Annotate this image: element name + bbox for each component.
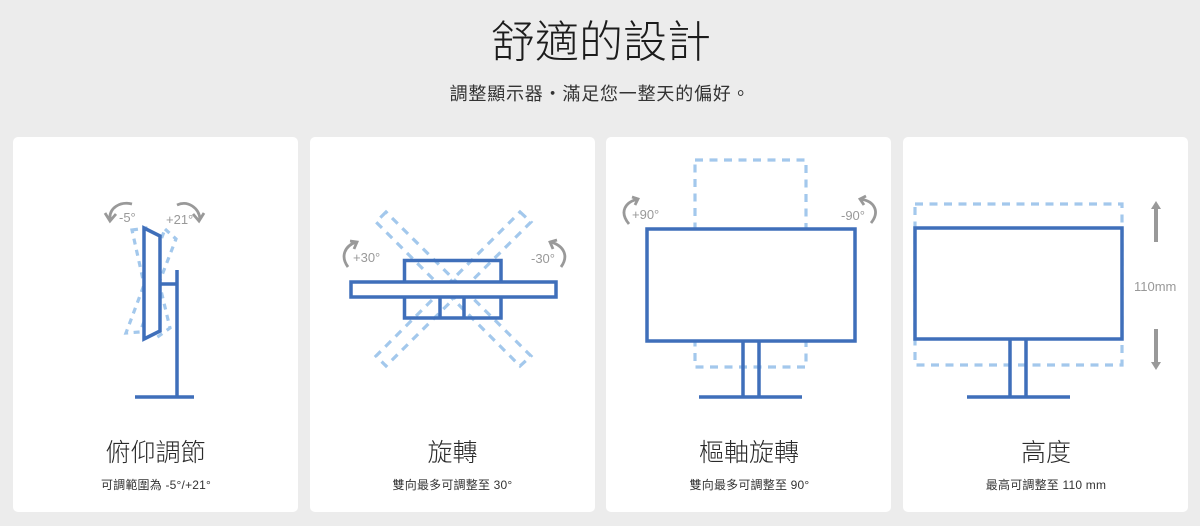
caption: height: 最高可調整至 110 mm	[986, 477, 1106, 492]
arrow: up	[1151, 201, 1161, 242]
heading: tilt: 俯仰調節	[105, 439, 206, 467]
label: minus 90 degrees: -90°	[841, 208, 865, 223]
label: minus 30 degrees: -30°	[531, 251, 555, 266]
panel: pivot	[606, 137, 891, 512]
title: 舒適的設計	[491, 18, 711, 67]
arrow: swivel right	[550, 240, 565, 267]
heading: swivel: 旋轉	[427, 439, 478, 467]
icon: pivot monitor	[647, 160, 855, 397]
arrow: tilt forward	[177, 203, 204, 221]
label: minus 5 degrees: -5°	[119, 210, 136, 225]
arrow: pivot left	[624, 197, 638, 224]
caption: pivot: 雙向最多可調整至 90°	[690, 477, 809, 492]
heading: height: 高度	[1021, 439, 1071, 467]
arrow: swivel left	[344, 241, 357, 267]
panel: tilt	[13, 137, 298, 512]
caption: tilt: 可調範圍為 -5°/+21°	[101, 477, 211, 492]
panel: swivel	[310, 137, 595, 512]
heading: pivot: 樞軸旋轉	[699, 439, 799, 467]
arrow: pivot right	[860, 196, 875, 223]
arrow: down	[1151, 329, 1161, 370]
caption: swivel: 雙向最多可調整至 30°	[393, 477, 512, 492]
label: plus 30 degrees: +30°	[353, 250, 380, 265]
icon: tilt monitor	[126, 228, 194, 397]
panel: height	[903, 137, 1188, 512]
arrow: tilt back	[105, 203, 132, 221]
icon: swivel monitor	[351, 212, 556, 366]
label: plus 21 degrees: +21°	[166, 212, 193, 227]
label: 110mm: 110mm	[1134, 279, 1176, 294]
label: plus 90 degrees: +90°	[632, 207, 659, 222]
subtitle: 調整顯示器・滿足您一整天的偏好。	[450, 84, 750, 104]
icon: height monitor	[915, 204, 1122, 397]
